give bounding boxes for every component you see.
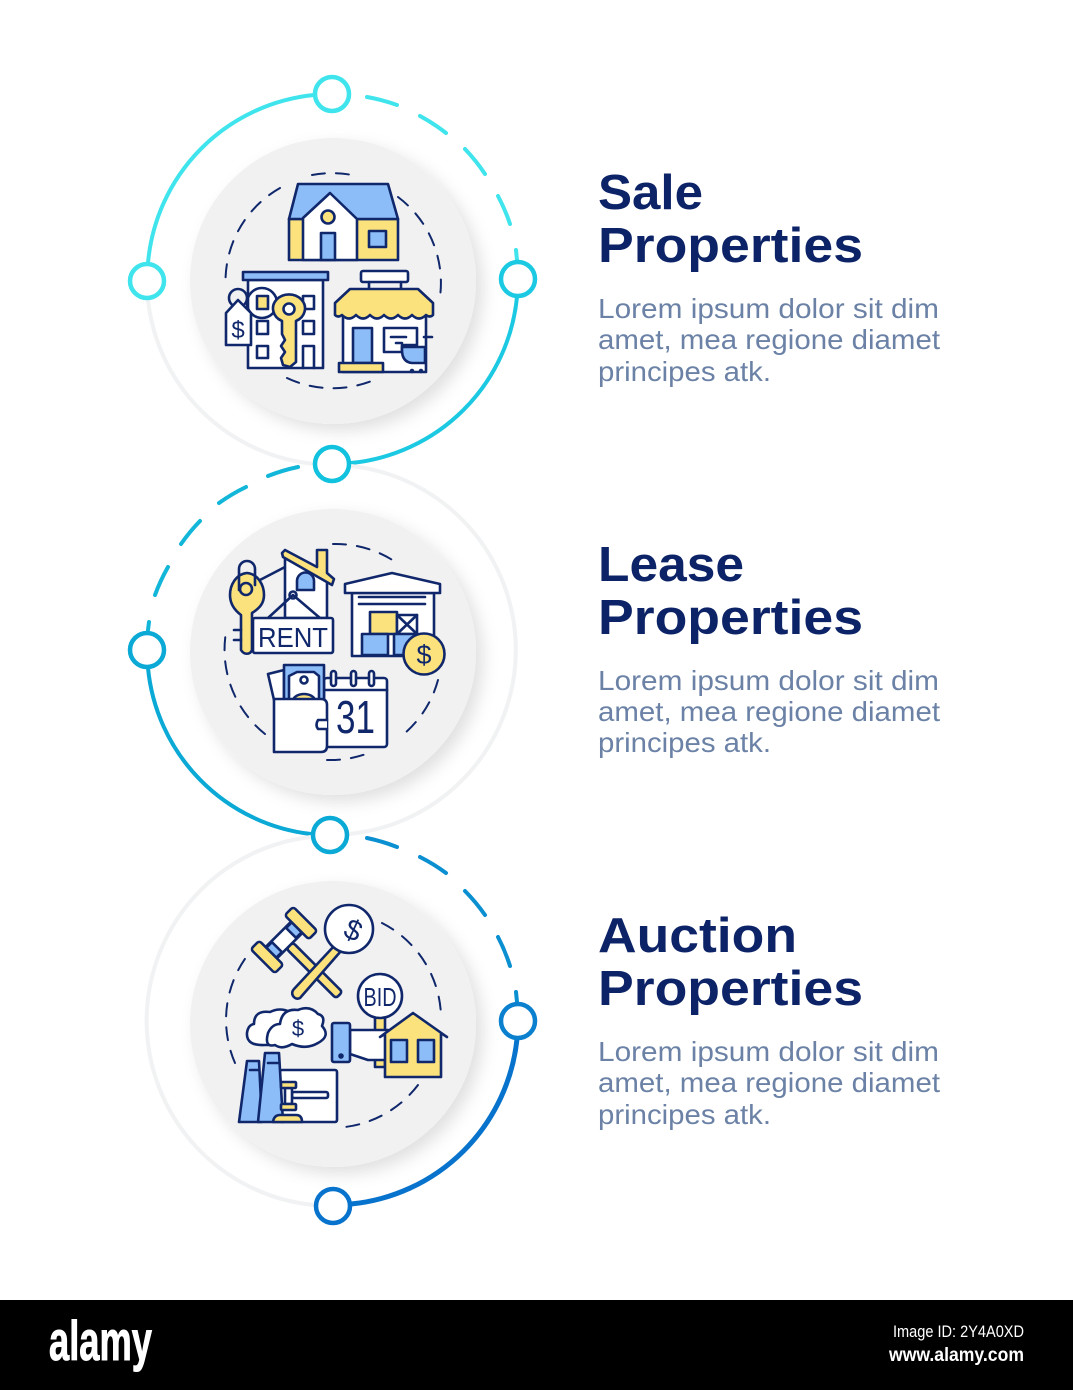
icon: wallet with cash and calendar: 31 [336, 691, 375, 743]
icon: lease properties [225, 544, 444, 760]
icon: crossed gavel and dollar magnifier [251, 905, 373, 1016]
footer logo: alamy [49, 1309, 152, 1372]
icon: apartment building with key and tag [226, 272, 328, 368]
text block: sale description: Lorem ipsum dolor sit dim [598, 293, 939, 324]
timeline nodes [130, 77, 535, 1223]
text block: lease description: principes atk. [598, 727, 771, 758]
icon: crossed gavel and dollar magnifier: $ [339, 913, 367, 949]
circle panel: sale properties [190, 138, 476, 424]
text block: sale description: amet, mea regione diamet [598, 324, 940, 355]
text block: auction description: principes atk. [598, 1099, 771, 1130]
icon: factory and gavel on document [239, 1053, 337, 1122]
text block: auction description: Lorem ipsum dolor sit dim [598, 1036, 939, 1067]
text block: sale description [598, 293, 940, 387]
icon: BID paddle, hand and house [332, 974, 447, 1077]
icon: wallet with cash and calendar [268, 665, 387, 752]
website: www.alamy.com [888, 1345, 1024, 1366]
text block: sale description: principes atk. [598, 356, 771, 387]
heading: lease properties: Lease [598, 538, 744, 592]
icon: house with rent sign and key [230, 550, 334, 654]
icon: auction properties [226, 905, 447, 1127]
timeline ring: sale properties [148, 95, 517, 464]
icon: apartment building with key and tag: $ [231, 317, 245, 344]
heading line: properties: Properties [598, 219, 863, 273]
icon: warehouse with coin: $ [416, 640, 432, 670]
image id: Image ID: 2Y4A0XD [893, 1322, 1024, 1341]
icon: shop with cart [335, 271, 433, 372]
icon: BID paddle, hand and house: BID [364, 982, 396, 1012]
icon: sale properties [226, 173, 441, 388]
timeline ring: auction properties [147, 837, 517, 1205]
circle panel: lease properties [190, 509, 476, 795]
footer bar [0, 1300, 1073, 1390]
heading: sale properties: Sale [598, 166, 703, 220]
circle panel: auction properties [190, 881, 476, 1167]
heading: auction properties: Auction [598, 909, 797, 963]
icon: money clouds [247, 1008, 326, 1047]
text block: auction description: amet, mea regione diamet [598, 1067, 940, 1098]
text block: lease description: Lorem ipsum dolor sit dim [598, 665, 939, 696]
heading line: properties: Properties [598, 591, 863, 645]
icon: house [289, 184, 398, 260]
timeline ring: lease properties [148, 466, 516, 834]
heading line: properties: Properties [598, 962, 863, 1016]
text block: lease description [598, 665, 940, 758]
icon: house with rent sign and key: RENT [258, 622, 328, 653]
icon: money clouds: $ [292, 1016, 304, 1041]
text block: auction description [598, 1036, 940, 1130]
text block: lease description: amet, mea regione diamet [598, 696, 940, 727]
icon: warehouse with coin [345, 573, 444, 674]
